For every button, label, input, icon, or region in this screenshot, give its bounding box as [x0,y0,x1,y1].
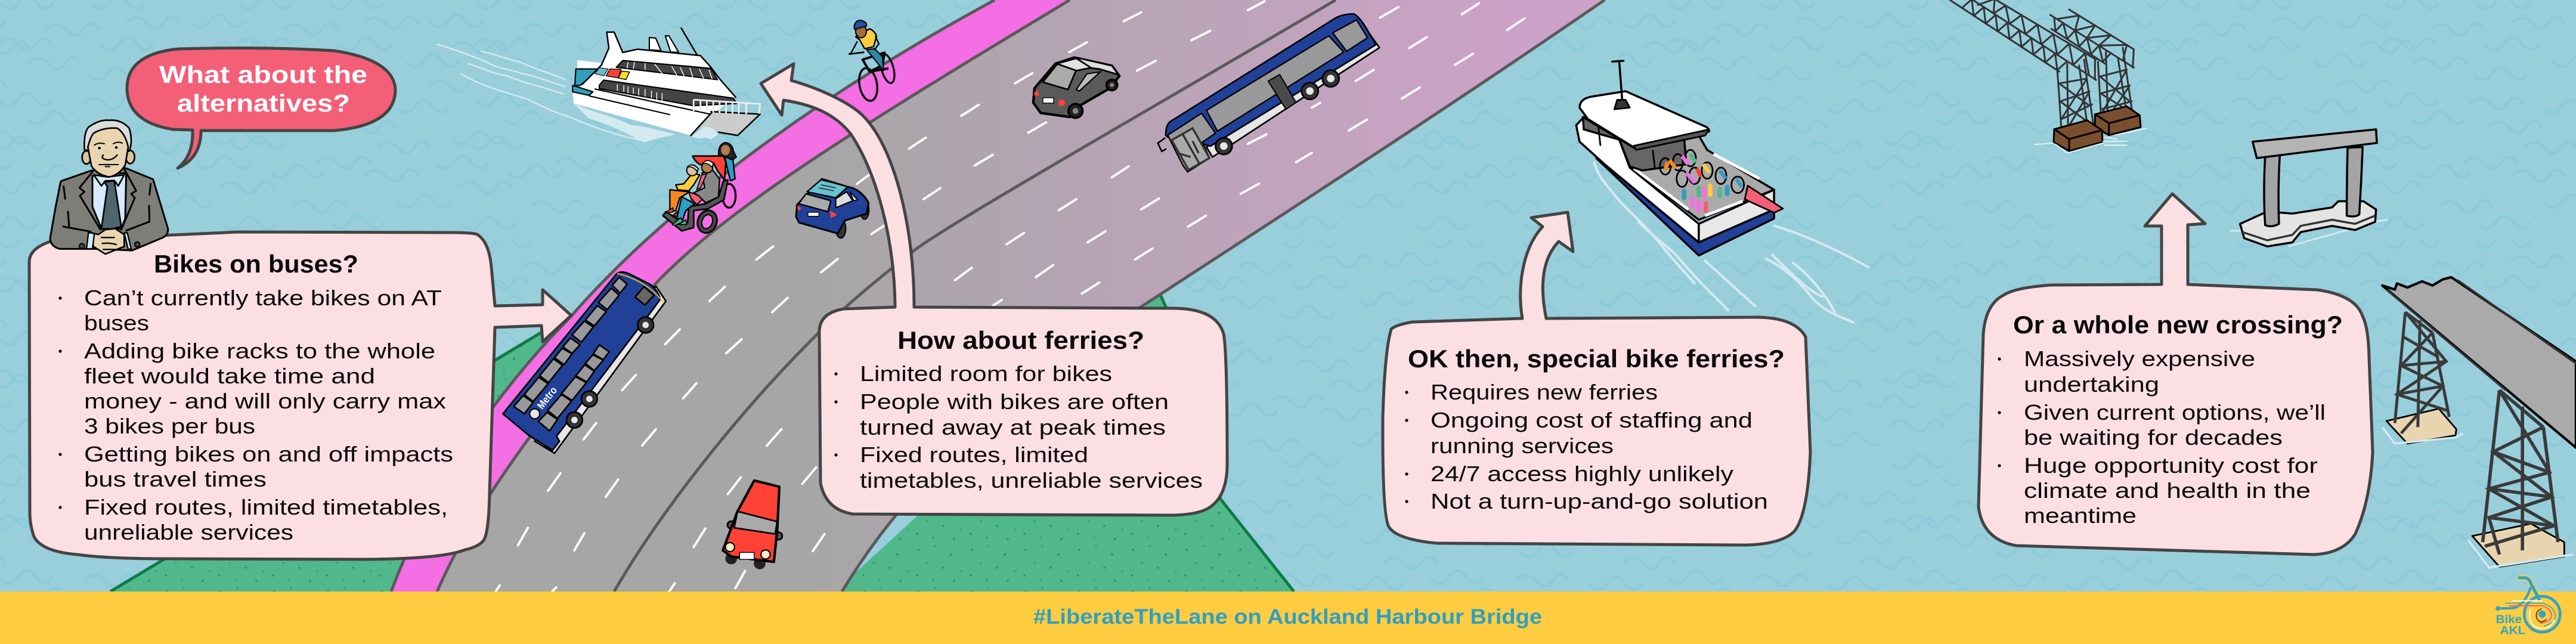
bullet list: turned away at peak times [860,415,1166,439]
bullet list: climate and health in the [2024,478,2311,503]
bullet list: Limited room for bikes [860,361,1112,386]
concrete pier [2230,129,2388,246]
bow railing [693,100,760,114]
bullet list [58,286,453,544]
wheels [1215,70,1339,154]
deck [1632,135,1774,220]
stern teal [575,69,600,85]
deck railings [1634,154,1760,216]
special bike ferry [1576,61,1868,323]
front gray [1168,113,1215,172]
bus with Metro livery in cycle lane [503,272,666,453]
lapels [63,169,151,231]
bullet list: bus travel times [84,467,267,491]
bullet list: Massively expensive [2024,346,2255,371]
skirt [1206,34,1379,157]
bullet list [1405,380,1768,513]
face [88,128,128,177]
wheelchair tandem riders [663,143,736,236]
tower C [2395,312,2449,434]
ears [82,151,91,164]
bullet list: buses [84,311,149,335]
grey car [1033,57,1119,118]
trusses [1950,0,2134,135]
bridge road deck [391,0,1605,592]
bullet list: Adding bike racks to the whole [84,339,435,363]
BikeAKL logo [2496,578,2560,637]
helper [724,155,735,181]
tie [101,181,121,229]
hull [572,32,736,135]
panel: new crossing [1979,194,2373,555]
bullet list: Ongoing cost of staffing and [1431,408,1753,432]
bullet list: Huge opportunity cost for [2024,453,2318,478]
bullet list: money - and will only carry max [84,389,446,413]
bus on upper carriageway [1158,14,1379,172]
bullet list: Given current options, we’ll [2024,400,2326,425]
shirt [92,173,126,228]
front wheel [694,208,720,236]
mast [1612,61,1624,101]
bullet list: Requires new ferries [1431,380,1658,404]
land: left shore [110,310,584,592]
ferry wake [438,44,676,143]
bullet list: be waiting for decades [2024,425,2283,450]
white hull side [1576,117,1699,242]
bullet list: undertaking [2024,372,2159,397]
speech bubble: what about the alternatives: What about the [159,61,367,88]
mirror [1158,138,1166,151]
panel shape with arrow up [1979,194,2373,555]
brown piers [2054,106,2141,151]
land: central island [835,293,1294,592]
blue car [796,179,869,238]
stern [1699,190,1774,242]
heading: How about ferries? [897,326,1144,354]
ferry wake [1594,162,1868,323]
heading: Or a whole new crossing? [2013,311,2343,339]
panel shape with arrow to bike ferry [1383,212,1810,545]
bus body [535,286,666,453]
sand footings [2386,408,2456,444]
truss towers with brown piers [1950,0,2147,153]
tower D [2483,390,2558,555]
speech bubble: what about the alternatives [127,48,395,168]
bullet list: fleet would take time and [84,364,375,388]
bow foam [692,127,719,140]
bus wheels [566,317,654,428]
bullet list: running services [1431,434,1614,458]
funnels and mast [649,36,679,52]
new crossing deck on towers [2382,277,2576,568]
bullet list: meantime [2024,503,2137,528]
bus with Metro livery in cycle lane: Metro [535,385,559,411]
bullet list: timetables, unreliable services [860,468,1203,493]
red car [723,481,782,569]
bullet list: Getting bikes on and off impacts [84,442,453,466]
ferry with wake [438,28,760,143]
bullet list: Fixed routes, limited timetables, [84,495,448,519]
heading: Bikes on buses? [154,250,358,278]
footer band [0,592,2576,644]
rear passenger [689,192,704,205]
footer band: #LiberateTheLane on Auckland Harbour Bridge [1033,605,1542,628]
panel: special bike ferries [1383,212,1810,545]
facial features [94,143,122,166]
panel: bikes on buses [29,232,571,559]
man in suit [50,120,168,254]
panel: how about ferries [761,64,1227,515]
bullet list: unreliable services [84,520,293,544]
cabin [1583,117,1686,171]
bullet list: Can’t currently take bikes on AT [84,286,442,310]
bikes on deck [1660,150,1744,193]
swim deck teal [572,85,593,95]
bus windows [514,277,654,431]
upper windows [617,60,717,80]
bullet list: People with bikes are often [860,389,1169,414]
blue body [1166,14,1376,146]
heading: OK then, special bike ferries? [1408,345,1785,373]
coloured panels [606,69,621,78]
collar [94,175,124,186]
lane markings [496,1,1524,592]
bullet list: Fixed routes, limited [860,442,1088,467]
people on deck [1684,185,1727,210]
bullet list [1998,346,2326,528]
BikeAKL logo: AKL [2500,624,2526,637]
blue hull [1596,158,1774,255]
cyclist in yellow [849,20,897,102]
speech bubble: what about the alternatives: alternatives? [177,89,350,117]
red canopy [693,156,726,180]
cuffs and buttons [86,233,131,249]
panel shape with arrow to ferry [761,64,1227,515]
front passenger [676,173,699,191]
bullet list: Not a turn-up-and-go solution [1431,489,1768,513]
deck [2382,277,2576,448]
roof [1580,91,1709,148]
bullet list: 3 bikes per bus [84,414,255,438]
hands [91,228,124,254]
main windows [1206,36,1343,131]
panel shape with arrow to bus [29,232,571,559]
Metro logo [530,409,540,419]
bow gray [699,112,760,135]
rear wheel [723,184,736,208]
rear deck railing [578,60,600,69]
pier water foam [2035,128,2147,153]
stern flag [1745,185,1783,213]
doors [1268,75,1296,109]
jacket [50,168,168,250]
BikeAKL logo: Bike [2496,614,2522,626]
hair [84,120,131,151]
bullet list [834,361,1203,493]
lower windows [599,80,736,106]
bullet list: 24/7 access highly unlikely [1431,462,1733,486]
frame [663,180,728,231]
